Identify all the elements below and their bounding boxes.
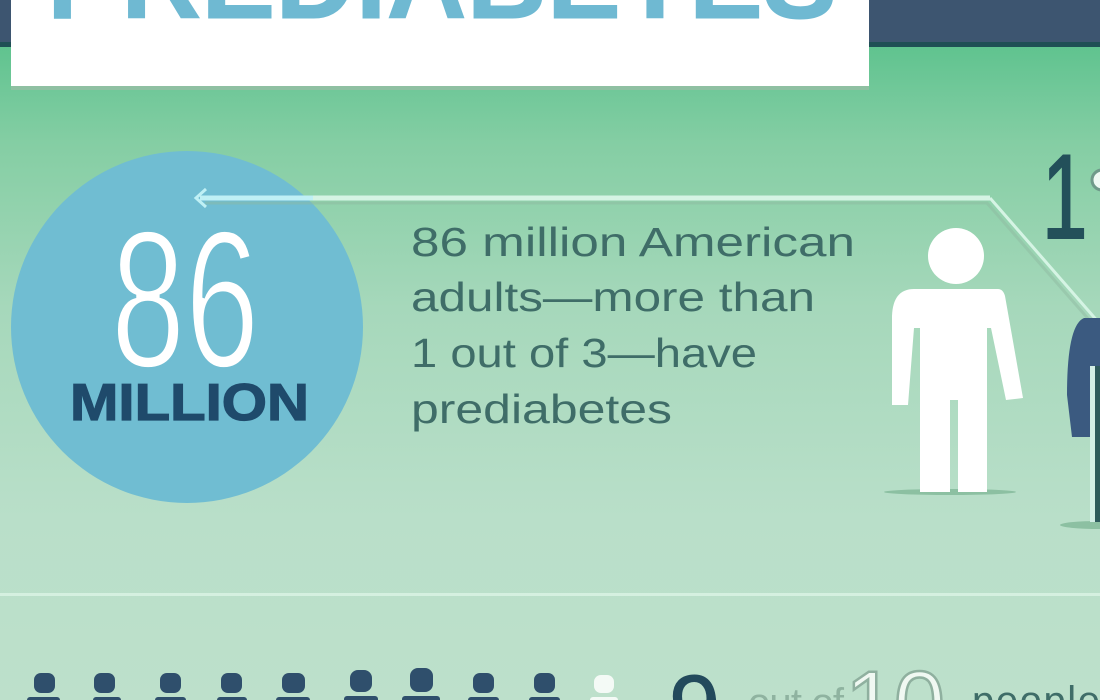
row of people icons [27,668,618,700]
person 6 [344,670,378,700]
big number 86: 86 [111,189,259,409]
top navy band [0,0,1100,47]
text: 86 million description: 1 out of 3—have [411,330,757,376]
text: 86 million description: 86 million American [411,219,855,265]
person 3 [155,673,186,700]
icon: dark person, cropped at the edge [1060,318,1100,529]
panel: 86 million circle [11,151,363,503]
statistic: 9 out of 10 people [669,653,1100,700]
text: 86 million description: adults—more than [411,274,815,320]
person 2 [93,673,121,700]
text: 86 million description: prediabetes [411,386,672,432]
arrow connecting person to circle [196,189,1100,330]
person 10, highlighted white [590,675,618,700]
title panel [11,0,869,90]
person 8 [468,673,499,700]
icon: white person [884,228,1023,495]
label: MILLION: MILLION [70,374,309,432]
person 5 [276,673,310,700]
partial letter beside numeral [1092,170,1100,190]
person 1 [27,673,60,700]
large numeral 1: 1 [1042,129,1087,264]
person 7 [402,668,440,700]
person 9 [529,673,560,700]
divider [0,593,1100,596]
person 4 [217,673,247,700]
text: 86 million description [411,219,855,432]
